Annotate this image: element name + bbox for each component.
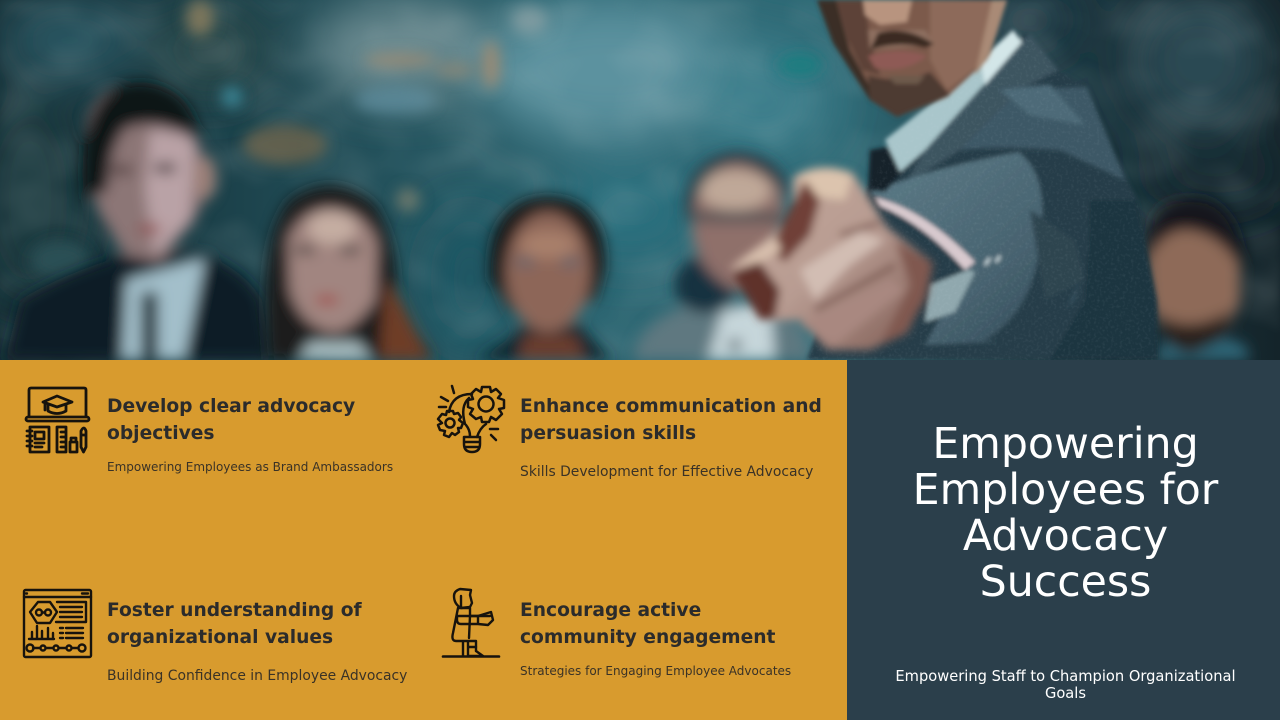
blurred colleague 1 [5,82,270,360]
blurred colleague 5 [1145,198,1250,360]
title [913,419,1218,607]
background wall blotches [0,0,1280,350]
heading: objective 2 [520,396,822,444]
icon: seated figure [442,588,500,658]
blurred colleague 3 [475,197,615,360]
pointing hand [730,167,933,350]
text: objective 3: Building Confidence in Employee Advocacy [107,668,407,684]
panel: objectives background [0,360,847,720]
text: objective 1: Empowering Employees as Brand Ambassadors [107,460,393,474]
heading: objective 3 [107,600,362,648]
subtitle [895,668,1236,702]
heading: objective 2: persuasion skills [520,423,696,444]
blurred colleague 2 [266,186,435,360]
text: objective 4: Strategies for Engaging Employee Advocates [520,664,791,678]
heading: objective 1 [107,396,355,444]
icon: laptop with graduation cap [24,386,90,454]
icon: lightbulb with gears [436,384,506,454]
pointing man's jacket and arm [807,30,1159,360]
heading: objective 3: Foster understanding of [107,600,362,621]
title: Success [980,557,1151,607]
hero photo: man pointing at viewer with blurred team behind [0,0,1280,360]
heading: objective 1: objectives [107,423,215,444]
text: objective 2: Skills Development for Effective Advocacy [520,464,813,480]
blurred colleague 4 [632,152,812,360]
heading: objective 3: organizational values [107,627,333,648]
heading: objective 2: Enhance communication and [520,396,822,417]
panel: title background [847,360,1280,720]
subtitle: Goals [1045,685,1086,702]
heading: objective 4 [520,600,775,648]
heading: objective 1: Develop clear advocacy [107,396,355,417]
heading: objective 4: Encourage active [520,600,701,621]
icon: dashboard window [22,588,92,658]
title: Employees for [913,465,1218,515]
heading: objective 4: community engagement [520,627,775,648]
subtitle: Empowering Staff to Champion Organizational [895,668,1236,685]
man's face [817,0,1007,117]
title: Empowering [932,419,1199,469]
title: Advocacy [963,511,1168,561]
